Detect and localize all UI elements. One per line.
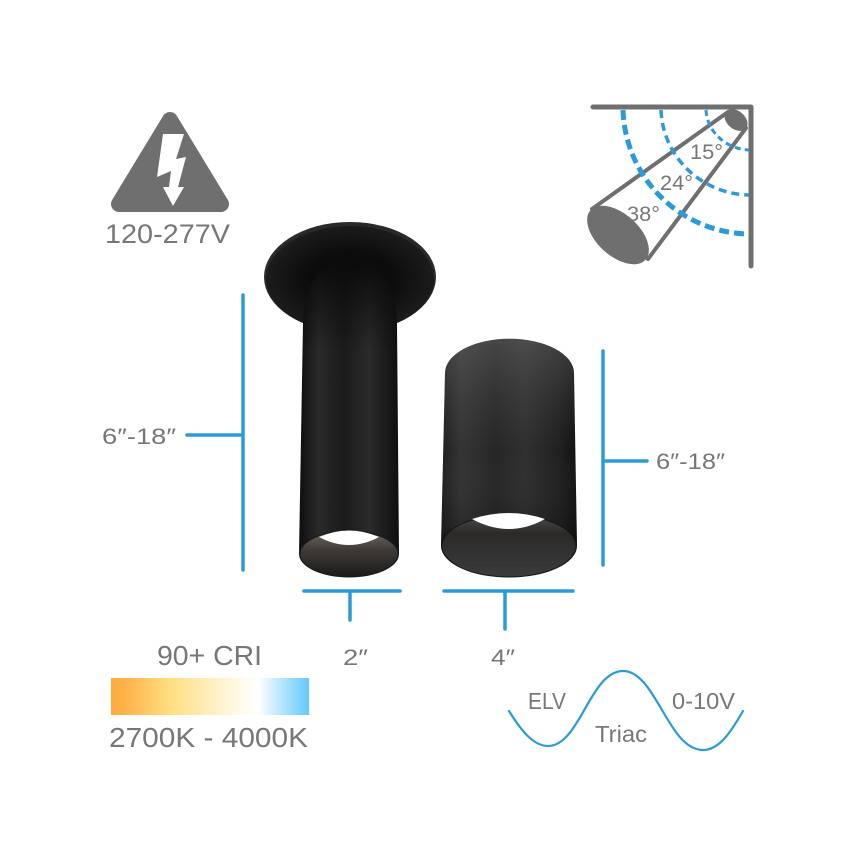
height dimension right: 6″-18″ bbox=[656, 449, 725, 474]
dimming block: Triac bbox=[595, 721, 647, 747]
beam cone bbox=[576, 105, 752, 275]
opening bbox=[299, 530, 399, 578]
CRI heading: 90+ CRI bbox=[157, 640, 262, 671]
height dimension right bbox=[603, 351, 725, 565]
dimming block bbox=[509, 671, 743, 750]
flange bbox=[264, 222, 436, 332]
angle labels: 15° bbox=[690, 141, 723, 164]
cylinder body bbox=[441, 339, 577, 546]
height dimension left: 6″-18″ bbox=[102, 424, 176, 449]
opening bbox=[441, 513, 577, 578]
dimming block: 0-10V bbox=[672, 688, 736, 714]
colour temperature range: 2700K - 4000K bbox=[109, 722, 308, 753]
fixture: flush mount with flange, 2 inch bbox=[264, 222, 436, 578]
width dimension 2 inch bbox=[304, 591, 400, 670]
voltage label: 120-277V bbox=[105, 219, 230, 249]
width dimension 2 inch: 2″ bbox=[343, 645, 368, 670]
beam angle icon: 38° bbox=[627, 203, 660, 226]
dashed beam arcs bbox=[623, 110, 749, 234]
icon: warning triangle with lightning bolt bbox=[119, 120, 221, 206]
voltage icon and label bbox=[105, 120, 230, 249]
dimming labels: ELV bbox=[528, 688, 567, 714]
colour temperature gradient bar bbox=[111, 678, 309, 715]
colour temperature block bbox=[109, 640, 309, 753]
beam angle icon: 24° bbox=[660, 172, 693, 195]
height dimension left bbox=[102, 295, 243, 570]
tube bbox=[299, 262, 399, 554]
width dimension 4 inch: 4″ bbox=[491, 645, 515, 670]
fixture: cylinder, 4 inch bbox=[441, 339, 577, 578]
width dimension 4 inch bbox=[444, 591, 573, 670]
beam angle icon bbox=[576, 105, 752, 275]
sine wave bbox=[509, 671, 743, 750]
ceiling and wall lines bbox=[593, 107, 751, 266]
